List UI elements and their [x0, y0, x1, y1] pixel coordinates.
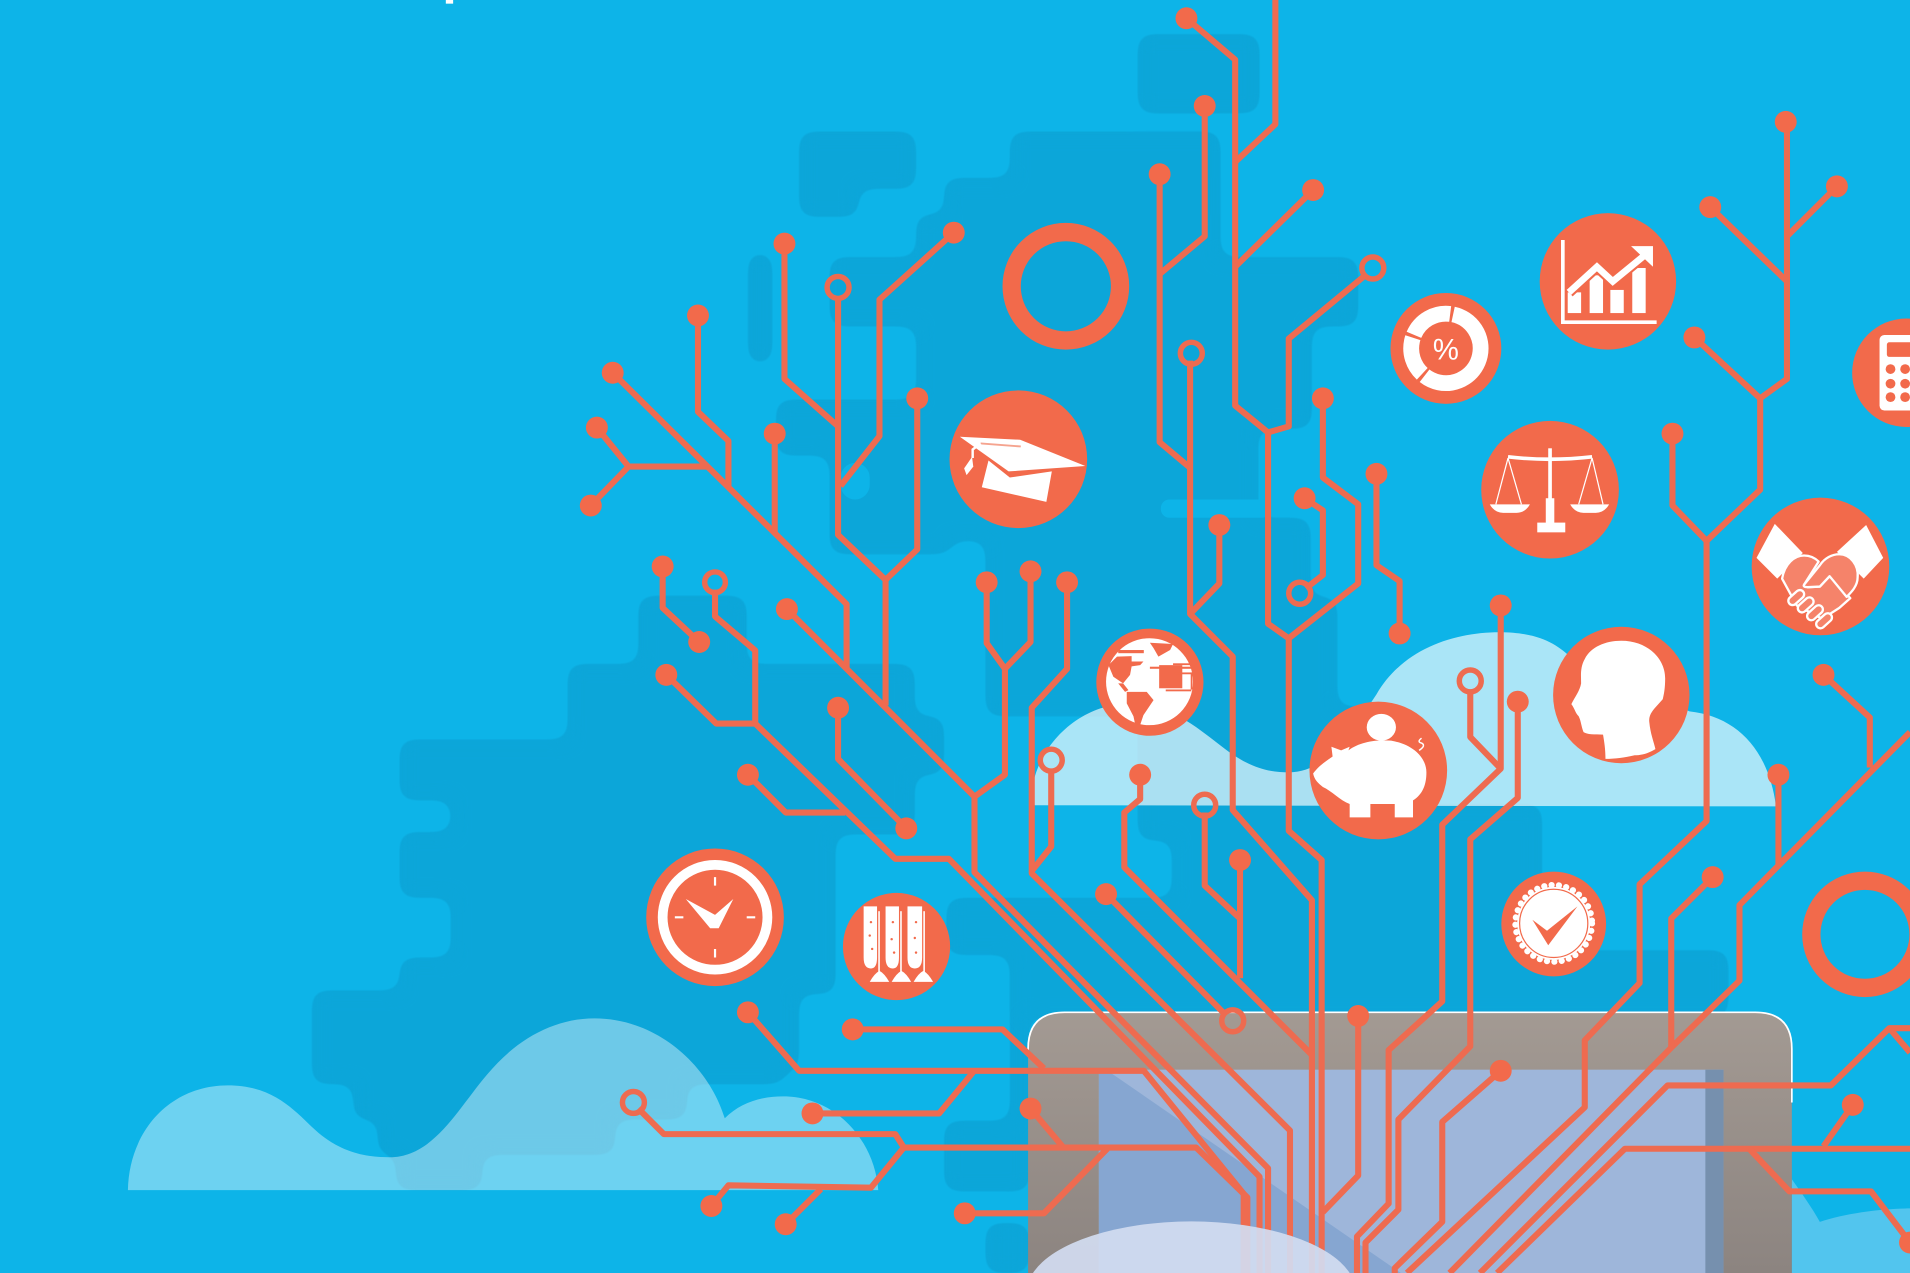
- cloud: lower left: [128, 1018, 878, 1190]
- cloud: tablet foreground: [1033, 1221, 1350, 1273]
- circuit lines: left tree: [591, 233, 1290, 1273]
- circuit lines: lower left: [638, 1012, 1247, 1273]
- background blotches: [312, 34, 1729, 1273]
- icon: certificate check: [1501, 872, 1606, 976]
- cloud: bottom right: [1792, 1179, 1910, 1273]
- tablet highlight: [1028, 1012, 1792, 1102]
- icon: percent donut: %: [1433, 334, 1459, 366]
- icon: clock: [646, 848, 784, 986]
- icon: calculator: [1852, 319, 1910, 427]
- icon: graduation cap: [950, 390, 1087, 528]
- circuit nodes: [580, 7, 1910, 1254]
- circuit lines: right tree: [1323, 122, 1910, 1273]
- tablet frame: [1028, 1012, 1792, 1273]
- tablet: [1028, 1012, 1792, 1273]
- title fragment: [446, 0, 453, 4]
- icon: globe: [1096, 629, 1203, 736]
- cloud: upper centre: [1031, 632, 1776, 806]
- tablet screen: [1099, 1070, 1724, 1273]
- circuit lines: centre: [1106, 0, 1400, 1273]
- decorative ring: top: [1012, 232, 1120, 340]
- icon: growth chart: [1540, 213, 1676, 350]
- decorative ring: right: [1811, 881, 1910, 988]
- icon: head: [1553, 627, 1690, 763]
- icon: percent donut: [1390, 293, 1501, 404]
- icon: scales of justice: [1481, 421, 1619, 559]
- icon: test tubes: [843, 893, 950, 1000]
- icon: handshake: [1752, 498, 1889, 635]
- icon: piggy bank: [1309, 702, 1447, 839]
